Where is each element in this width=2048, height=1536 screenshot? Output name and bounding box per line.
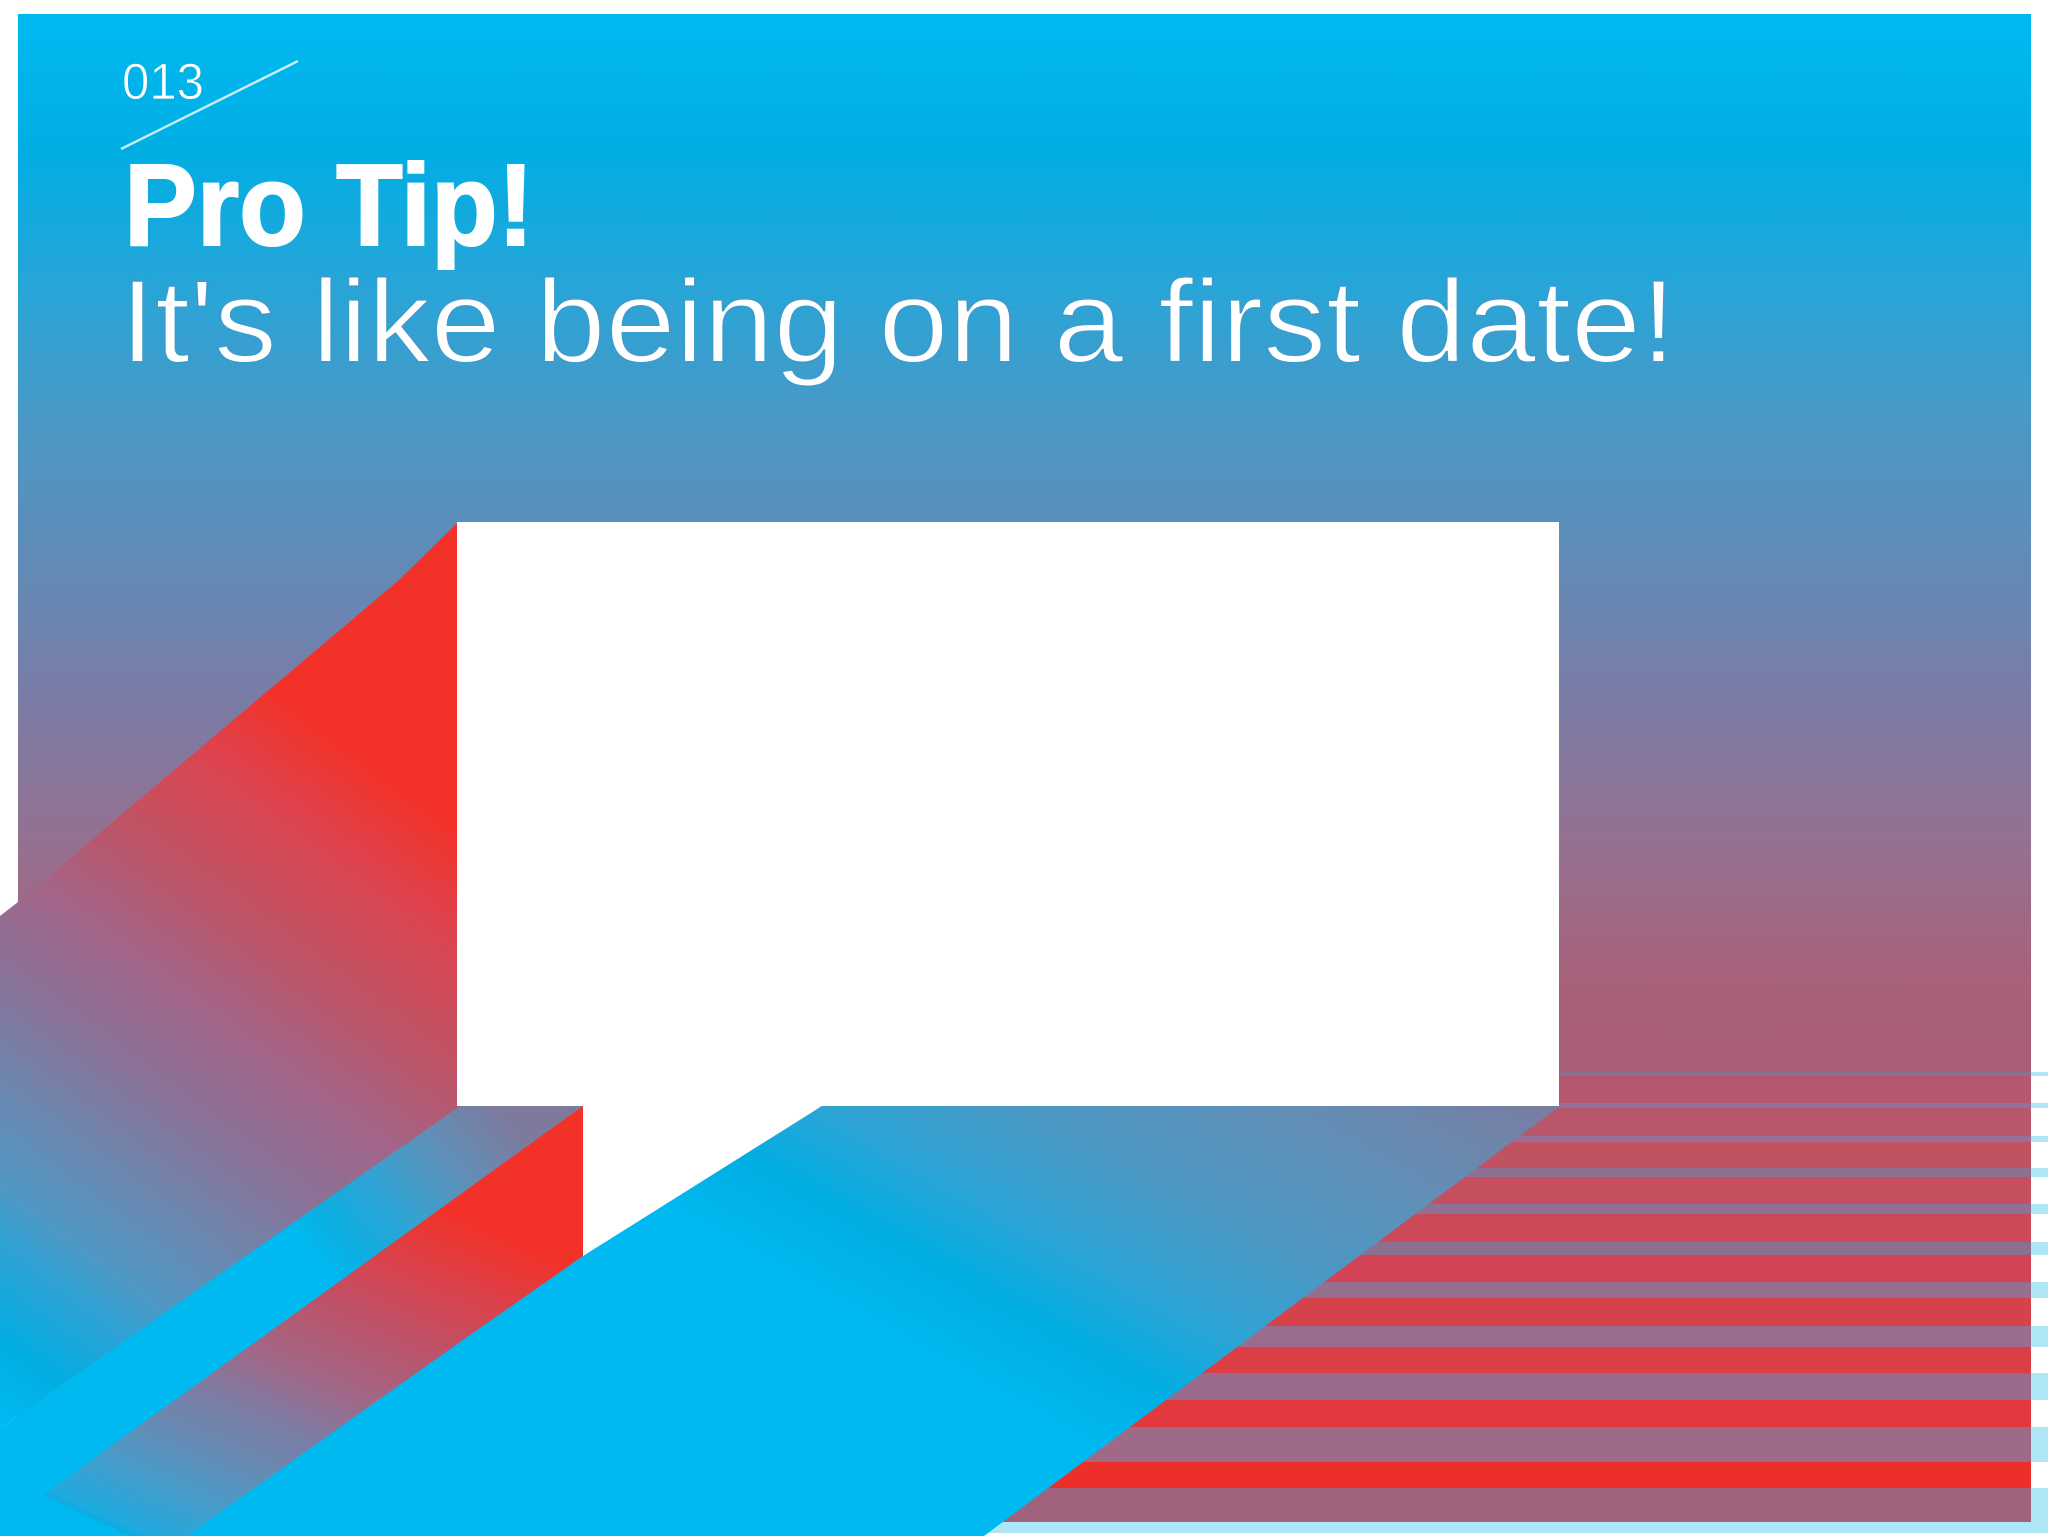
left red extrusion shape (0, 523, 460, 1428)
light blue stripe ticks outside panel (986, 1072, 2048, 1533)
diagonal rule (121, 61, 298, 149)
blue diagonal band (0, 1106, 583, 1536)
cyan bubble tail extrusion (187, 1106, 1560, 1536)
white speech bubble (457, 522, 1559, 1270)
red diagonal band (43, 1106, 583, 1536)
striped floor: red and mauve bands (900, 1072, 2031, 1522)
subheading: It's like being on a first date! (120, 256, 1676, 388)
heading: Pro Tip: Pro Tip! (124, 140, 534, 270)
issue number: 013 (122, 53, 204, 110)
